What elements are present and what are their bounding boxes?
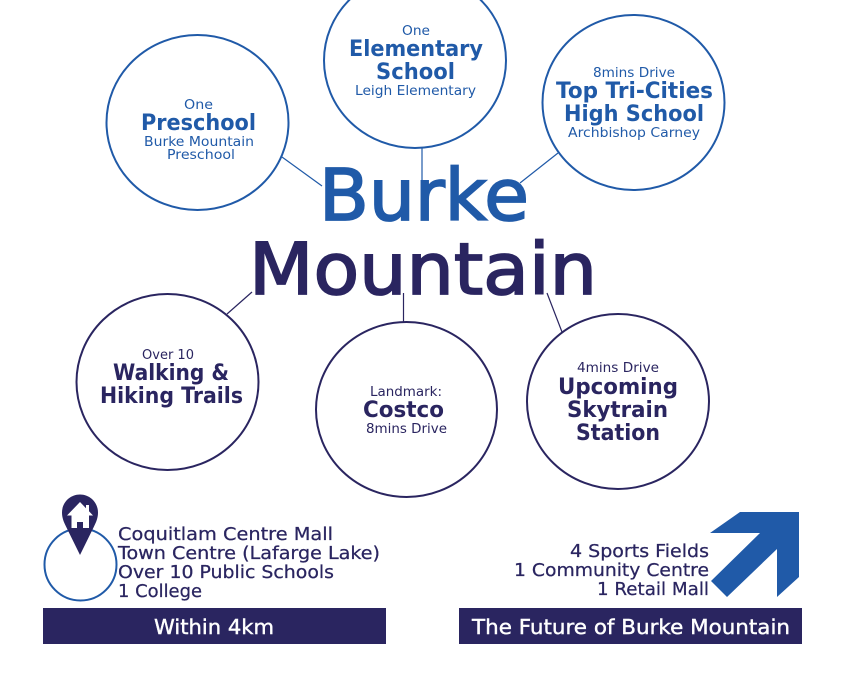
icon: location pin on circle <box>44 494 116 600</box>
circle: preschool: Preschool <box>167 148 235 163</box>
banner: the future of burke mountain <box>459 608 802 644</box>
circle: skytrain station: Station <box>576 421 660 446</box>
circle: preschool: Burke Mountain <box>144 135 254 150</box>
icon: upward arrow <box>710 512 799 597</box>
circle: elementary school <box>324 0 506 148</box>
text block: future amenities list: 4 Sports Fields <box>570 541 709 562</box>
circle: costco <box>316 322 497 497</box>
circle: elementary school: One <box>402 24 430 39</box>
title: Mountain <box>249 228 597 311</box>
banner: the future of burke mountain: The Future of Burke Mountain <box>471 615 790 639</box>
title: Burke <box>319 154 529 237</box>
text block: within 4km list: Over 10 Public Schools <box>118 562 334 583</box>
circle: high school: High School <box>564 102 704 127</box>
circle: high school <box>542 15 724 190</box>
circle: walking and hiking trails <box>76 294 258 470</box>
circle: high school: Archbishop Carney <box>568 126 700 141</box>
text block: within 4km list: Town Centre (Lafarge Lake) <box>117 543 380 564</box>
circle: high school: Top Tri-Cities <box>556 79 713 104</box>
circle: elementary school: Leigh Elementary <box>355 84 476 99</box>
text block: future amenities list: 1 Community Centre <box>514 560 709 581</box>
circle: walking and hiking trails: Over 10 <box>142 348 194 363</box>
circle: costco: Landmark: <box>370 385 442 400</box>
circle: skytrain station: Upcoming <box>558 375 678 400</box>
circle: high school: 8mins Drive <box>593 66 675 81</box>
banner: within 4km <box>43 608 386 644</box>
circle: skytrain station: Skytrain <box>567 398 668 423</box>
circle: walking and hiking trails: Hiking Trails <box>100 384 243 409</box>
text block: future amenities list: 1 Retail Mall <box>597 579 709 600</box>
circle: skytrain station: 4mins Drive <box>577 361 659 376</box>
circle: walking and hiking trails: Walking & <box>113 361 229 386</box>
circle: preschool: Preschool <box>141 111 256 136</box>
circle: preschool <box>106 35 288 210</box>
circle: preschool: One <box>184 98 213 113</box>
banner: within 4km: Within 4km <box>154 615 274 639</box>
circle: costco: Costco <box>363 398 444 423</box>
text block: within 4km list: 1 College <box>118 581 202 602</box>
circle: elementary school: Elementary <box>349 37 483 62</box>
circle: skytrain station <box>527 314 709 489</box>
title <box>249 154 597 311</box>
connector lines <box>227 148 562 332</box>
text block: within 4km list: Coquitlam Centre Mall <box>118 524 333 545</box>
text block: within 4km list <box>117 524 380 602</box>
text block: future amenities list <box>514 541 709 600</box>
circle: elementary school: School <box>376 60 455 85</box>
circle: costco: 8mins Drive <box>366 422 447 437</box>
